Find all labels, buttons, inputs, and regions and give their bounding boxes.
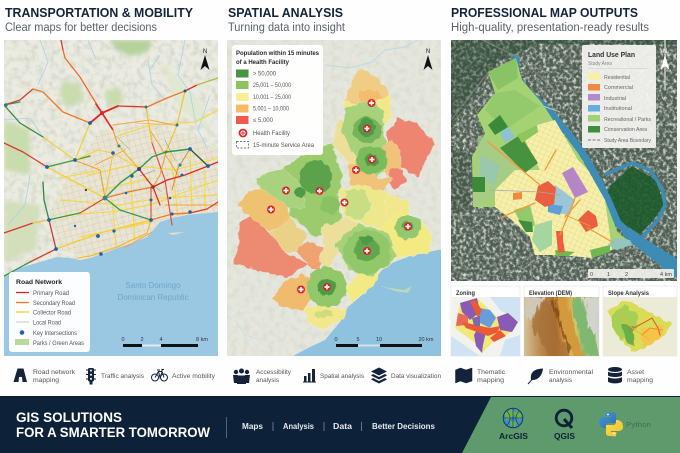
icon row: outputs: analysis xyxy=(549,377,573,384)
heading: transportation and mobility xyxy=(5,5,193,34)
logo: QGIS: QGIS xyxy=(554,432,576,441)
footer tagline: Maps xyxy=(242,422,264,431)
scale bar: middle map: 5 xyxy=(356,337,360,343)
scale bar: right map: 2 xyxy=(625,272,628,278)
icon row: analysis: Accessibility xyxy=(256,369,292,376)
icon row: analysis: Spatial analysis xyxy=(320,373,365,380)
icon: folded map xyxy=(456,368,472,383)
heading: professional map outputs: PROFESSIONAL MAP OUTPUTS xyxy=(451,5,638,20)
scale bar: left map: 8 km xyxy=(196,337,208,343)
icon: north arrow: N xyxy=(426,49,430,55)
footer green section xyxy=(462,397,680,453)
legend: population within 15 minutes: > 50,000 xyxy=(253,72,277,78)
icon row: transportation: Traffic analysis xyxy=(101,373,145,380)
legend: road network: Primary Road xyxy=(33,291,69,297)
footer title: FOR A SMARTER TOMORROW xyxy=(16,425,210,440)
icon: bar chart xyxy=(303,369,316,382)
icon row: transportation: mapping xyxy=(33,377,59,384)
heading: professional map outputs: High-quality, presentation-ready results xyxy=(451,22,649,34)
legend: road network xyxy=(9,272,90,352)
legend: road network: Parks / Green Areas xyxy=(33,341,84,347)
footer title xyxy=(16,410,210,440)
panel: spatial analysis map xyxy=(227,40,441,356)
icon row: outputs: Thematic xyxy=(477,369,506,376)
logo: ArcGIS: ArcGIS xyxy=(499,432,529,441)
legend: population within 15 minutes: ≤ 5,000 xyxy=(253,118,274,124)
heading: spatial analysis: SPATIAL ANALYSIS xyxy=(228,5,343,20)
scale bar: right map: 1 xyxy=(607,272,610,278)
logo: Python xyxy=(599,412,651,436)
legend: population within 15 minutes xyxy=(232,45,323,155)
legend: road network: Collector Road xyxy=(33,310,71,316)
legend: road network: Secondary Road xyxy=(33,301,75,307)
legend: land use plan: Industrial xyxy=(604,96,626,102)
legend: road network: Key Intersections xyxy=(33,331,77,337)
scale bar: left map xyxy=(121,337,208,347)
footer banner xyxy=(0,396,680,453)
inset map: slope analysis: Slope Analysis xyxy=(608,291,650,297)
footer tagline: Data xyxy=(333,422,353,431)
icon row: transportation: Road network xyxy=(33,369,76,376)
legend: land use plan xyxy=(582,45,656,148)
icon: north arrow xyxy=(200,49,210,70)
scale bar: right map: 4 km xyxy=(660,272,672,278)
icon: leaf xyxy=(528,368,543,384)
legend: land use plan: Institutional xyxy=(604,106,632,112)
icon row: outputs: Environmental xyxy=(549,369,594,376)
logo: ArcGIS xyxy=(499,408,529,441)
scale bar: left map: 2 xyxy=(140,337,144,343)
icon: database xyxy=(608,367,622,383)
footer tagline: Analysis xyxy=(283,422,315,431)
footer tagline xyxy=(242,422,436,431)
icon row: transportation: Active mobility xyxy=(172,373,216,380)
legend: road network: Road Network xyxy=(16,279,62,286)
logo: Python: Python xyxy=(626,422,651,429)
place label: Santo Domingo: Dominican Republic xyxy=(117,293,189,302)
heading: spatial analysis xyxy=(228,5,346,34)
heading: spatial analysis: Turning data into insight xyxy=(228,22,346,34)
legend: land use plan: Conservation Area xyxy=(604,127,648,133)
icon row: analysis: analysis xyxy=(256,377,280,384)
icon: traffic light xyxy=(86,368,96,384)
icon row: outputs: mapping xyxy=(477,377,504,384)
logo: QGIS xyxy=(554,410,576,441)
legend: population within 15 minutes: 25,001 – 50,000 xyxy=(253,83,292,89)
legend: land use plan: Commercial xyxy=(604,85,633,91)
legend: land use plan: Study Area xyxy=(588,61,612,67)
inset map: slope analysis xyxy=(603,286,677,356)
scale bar: left map: 4 xyxy=(159,337,163,343)
scale bar: middle map: 10 xyxy=(376,337,382,343)
icon: bicycle xyxy=(152,370,168,381)
icon: road xyxy=(14,368,27,382)
icon row: outputs: mapping xyxy=(627,377,653,384)
legend: population within 15 minutes: 15-minute Service Area xyxy=(253,143,315,149)
inset map: zoning: Zoning xyxy=(456,291,475,297)
icon row: transportation xyxy=(14,368,216,384)
legend: land use plan: Residential xyxy=(604,75,630,81)
legend: road network: Local Road xyxy=(33,320,61,326)
icon: north arrow: N xyxy=(203,49,207,55)
heading: transportation and mobility: Clear maps for better decisions xyxy=(5,22,157,34)
inset map: elevation DEM: Elevation (DEM) xyxy=(529,291,572,297)
footer title: GIS SOLUTIONS xyxy=(16,410,122,425)
legend: population within 15 minutes: 5,001 – 10,000 xyxy=(253,106,290,112)
icon: north arrow xyxy=(660,49,670,70)
scale bar: right map: 0 xyxy=(590,272,593,278)
icon: layers xyxy=(371,368,387,384)
scale bar: middle map xyxy=(334,337,434,347)
legend: population within 15 minutes: Health Facility xyxy=(253,131,290,137)
footer tagline: Better Decisions xyxy=(372,422,436,431)
heading: professional map outputs xyxy=(451,5,649,34)
icon row: analysis: Data visualization xyxy=(391,373,441,380)
legend: land use plan: Recreational / Parks xyxy=(604,117,651,123)
icon: people xyxy=(233,368,250,384)
scale bar: right map xyxy=(588,269,674,278)
inset map: zoning xyxy=(451,286,520,356)
legend: population within 15 minutes: of a Health Facility xyxy=(236,60,290,66)
icon row: outputs xyxy=(456,367,653,384)
legend: population within 15 minutes: 10,001 – 25,000 xyxy=(253,95,292,101)
panel: land use plan map xyxy=(451,40,677,281)
legend: population within 15 minutes: Population within 15 minutes xyxy=(236,51,320,57)
scale bar: left map: 0 xyxy=(121,337,125,343)
legend: land use plan: Land Use Plan xyxy=(588,52,635,59)
legend: land use plan: Study Area Boundary xyxy=(604,138,651,144)
inset map: elevation DEM xyxy=(524,286,599,356)
icon row: outputs: Asset xyxy=(627,369,644,376)
scale bar: middle map: 20 km xyxy=(419,337,434,343)
place label: Santo Domingo: Santo Domingo xyxy=(125,281,181,290)
icons: health facility markers xyxy=(267,99,412,294)
panel: road network map xyxy=(4,40,218,356)
scale bar: middle map: 0 xyxy=(334,337,338,343)
place label: Santo Domingo xyxy=(117,281,189,302)
icon: north arrow xyxy=(424,49,432,70)
heading: transportation and mobility: TRANSPORTATION & MOBILITY xyxy=(5,5,193,20)
icon row: analysis xyxy=(233,368,441,384)
icon: north arrow: N xyxy=(663,49,667,55)
